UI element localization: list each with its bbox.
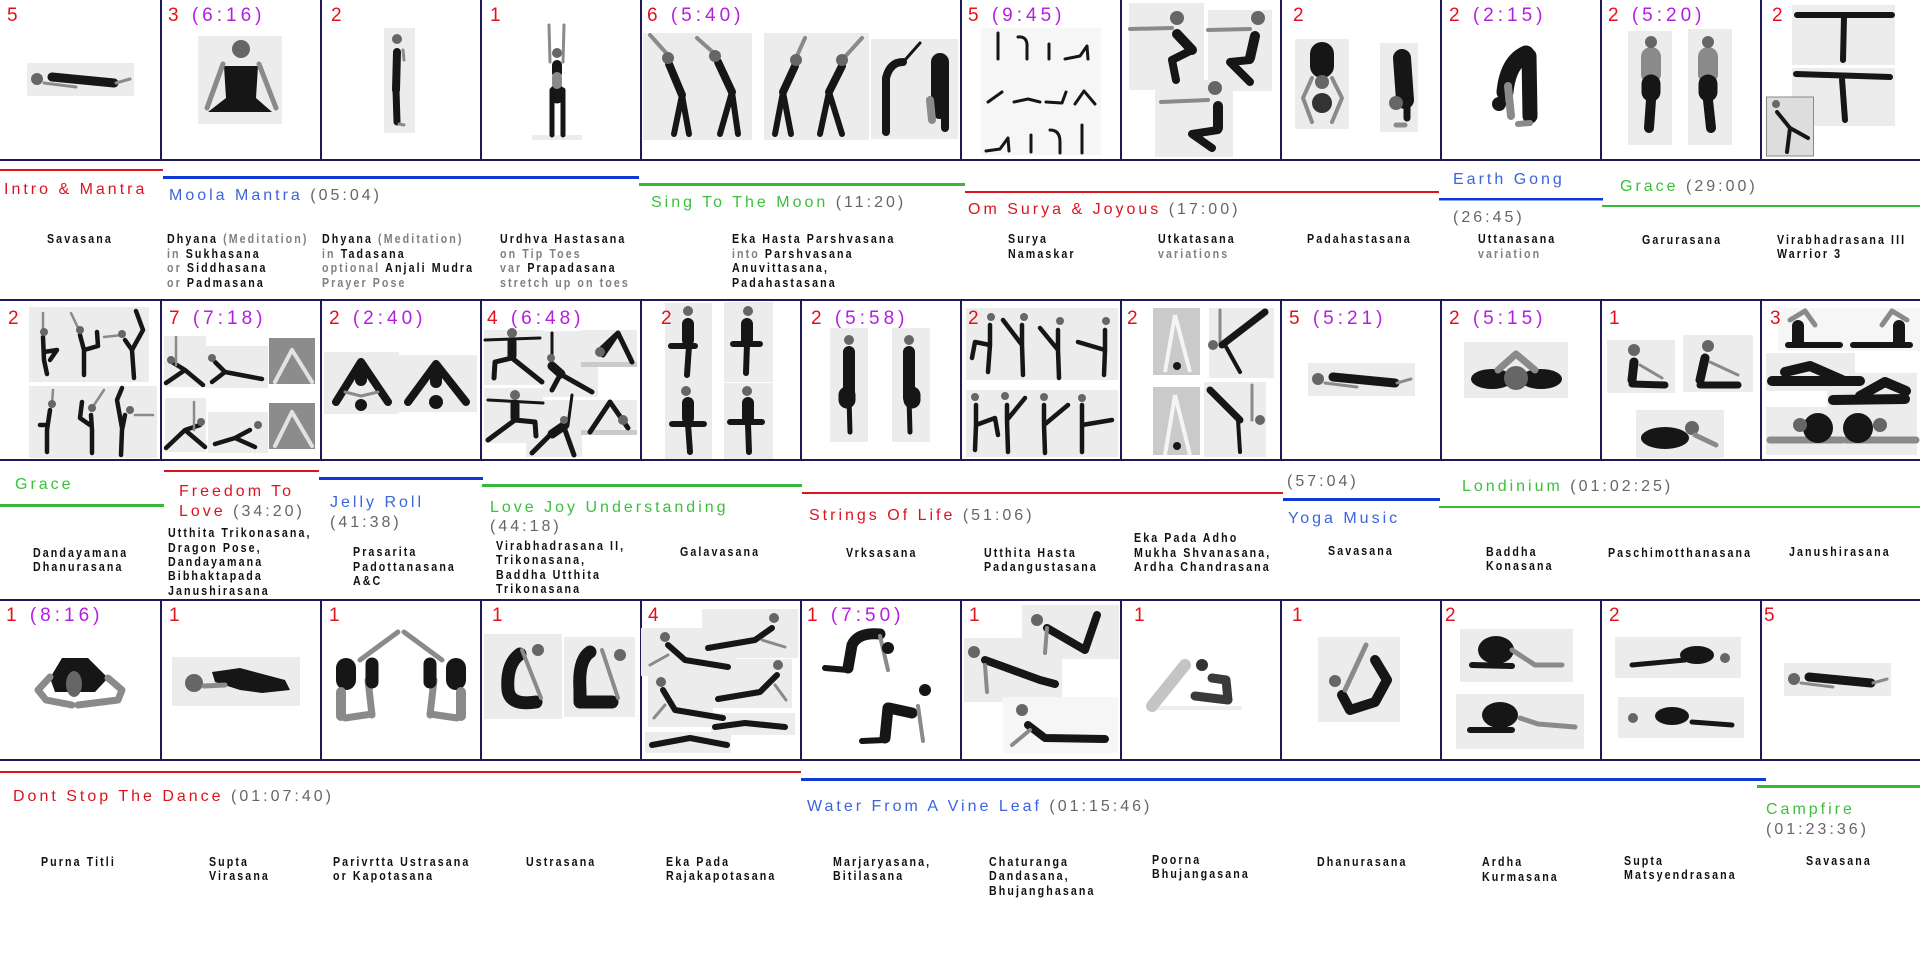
pose name: Utthita Trikonasana group: Dandayamana [168, 554, 263, 569]
rule: Earth Gong [1439, 198, 1603, 200]
pose name: Marjaryasana, Bitilasana: Bitilasana [833, 868, 904, 883]
number: 1 [490, 5, 505, 26]
panel: Eka Pada Adho Mukha Shvanasana [1127, 308, 1274, 457]
pose name: Surya Namaskar: Namaskar [1008, 246, 1076, 261]
pose name: Supta Virasana: Supta [209, 854, 249, 869]
number: 2 [1609, 605, 1624, 626]
number: 1 [969, 605, 984, 626]
panel: Uttanasana [1449, 5, 1546, 124]
pose name: Dhyana in Tadasana: Prayer Pose [322, 275, 407, 290]
rule: Londinium [1439, 506, 1920, 508]
pose name: Chaturanga group: Dandasana, [989, 868, 1070, 883]
number: 5 [1764, 605, 1779, 626]
heading: Yoga Music: (57:04) [1287, 473, 1359, 490]
number: 2 [1772, 5, 1787, 26]
heading: Moola Mantra: Moola Mantra (05:04) [169, 187, 382, 204]
pose name: Eka Pada Adho Mukha Shvanasana: Eka Pada Adho [1134, 530, 1238, 545]
heading: Love Joy Understanding: (44:18) [490, 518, 562, 535]
rule: Grace [0, 504, 164, 507]
pose name: Purna Titli: Purna Titli [41, 854, 116, 869]
number and time: 2 (5:15) [1449, 308, 1546, 329]
figures: one-legged pigeon series [641, 609, 798, 753]
number: 2 [1127, 308, 1142, 329]
panel: Purna Titli [6, 605, 122, 705]
figures: camel pose [484, 634, 635, 719]
pose name: Poorna Bhujangasana: Bhujangasana [1152, 866, 1250, 881]
number: 2 [968, 308, 983, 329]
panel: Tadasana [331, 5, 415, 133]
panel: Savasana (row 2) [1289, 308, 1415, 396]
figure: bow pose [1318, 637, 1400, 722]
figures: head to knee [1766, 308, 1920, 455]
number: 2 [331, 5, 346, 26]
pose name: Poorna Bhujangasana: Poorna [1152, 852, 1201, 867]
figures: chair pose variations [1129, 3, 1272, 157]
pose name: Dhyana in Sukhasana: or Padmasana [167, 275, 265, 290]
pose name: Utthita Trikonasana group: Bibhaktapada [168, 568, 263, 583]
number and time: 3 (6:16) [168, 5, 266, 26]
panel: Paschimotthanasana [1607, 308, 1753, 458]
panel: Galavasana [661, 302, 773, 459]
number and time: 1 (7:50) [807, 605, 904, 626]
pose name: Virabhadrasana II group: Baddha Utthita [496, 567, 601, 582]
figures: warrior, extended angle, pyramid [484, 328, 637, 457]
panel: Padahastasana [1293, 5, 1418, 132]
number: 2 [1293, 5, 1308, 26]
pose name: Vrksasana: Vrksasana [846, 545, 918, 560]
pose name: Urdhva Hastasana: Urdhva Hastasana [500, 231, 626, 246]
panel: Supta Virasana [169, 605, 300, 706]
number and time: 6 (5:40) [647, 5, 744, 26]
rule: Moola Mantra [163, 176, 639, 179]
heading: Londinium: Londinium (01:02:25) [1462, 478, 1673, 495]
pose name: Supta Matsyendrasana: Supta [1624, 853, 1664, 868]
panel: Dhanurasana [1292, 605, 1400, 722]
pose name: Supta Matsyendrasana: Matsyendrasana [1624, 867, 1737, 882]
panel: Poorna Bhujangasana [1134, 605, 1242, 710]
figures: extended hand to big toe [966, 308, 1118, 457]
figure: lying pose [1308, 363, 1415, 396]
rule: Om Surya & Joyous [965, 191, 1439, 193]
figure: mirrored camel pair [341, 632, 461, 718]
pose name: Utkatasana: Utkatasana [1158, 231, 1236, 246]
number: 2 [8, 308, 23, 329]
panel: Parivrtta Ustrasana [329, 605, 461, 718]
figures: wide-leg fold [324, 352, 477, 414]
number: 1 [492, 605, 507, 626]
pose name: Padahastasana: Padahastasana [1307, 231, 1412, 246]
panel: Savasana (row 1) [7, 5, 134, 96]
number: 2 [661, 308, 676, 329]
pose name: Parivrtta Ustrasana: Parivrtta Ustrasana [333, 854, 470, 869]
panel: Savasana (row 3) [1764, 605, 1891, 696]
number and time: 5 (5:21) [1289, 308, 1386, 329]
panel: Supta Matsyendrasana [1609, 605, 1744, 738]
number and time: 2 (2:15) [1449, 5, 1546, 26]
panel: Garurasana [1608, 5, 1732, 145]
pose name: Virabhadrasana II group: Trikonasana [496, 581, 581, 596]
pose name: Chaturanga group: Bhujanghasana [989, 883, 1095, 898]
heading: Water From A Vine Leaf: Water From A Vine Leaf (01:15:46) [807, 798, 1152, 815]
heading: Campfire: Campfire [1766, 801, 1855, 818]
pose name: Galavasana: Galavasana [680, 544, 760, 559]
heading: Grace: Grace (29:00) [1620, 178, 1758, 195]
number: 4 [648, 605, 663, 626]
panel: Dandayamana Dhanurasana [8, 307, 157, 458]
pose name: Ardha Kurmasana: Ardha [1482, 854, 1523, 869]
panel: Surya Namaskar [968, 5, 1101, 155]
pose name: Dhyana in Tadasana: Dhyana (Meditation) [322, 231, 464, 246]
figures: seated forward bend [1607, 335, 1753, 458]
pose name: Garurasana: Garurasana [1642, 232, 1722, 247]
panel: Ustrasana [484, 605, 635, 719]
figure: lying pose [1784, 663, 1891, 696]
figure: lying pose [27, 63, 134, 96]
heading: Love Joy Understanding: Love Joy Understanding [490, 499, 729, 516]
pose name: Virabhadrasana III: Virabhadrasana III [1777, 232, 1906, 247]
pose name: Parivrtta Ustrasana: or Kapotasana [333, 868, 434, 883]
pose name: Utkatasana: variations [1158, 246, 1229, 261]
pose name: Dhyana in Sukhasana: or Siddhasana [167, 260, 268, 275]
number: 3 [1129, 5, 1144, 26]
figures: one-leg down dog and half moon [1153, 308, 1274, 457]
heading: Campfire: (01:23:36) [1766, 821, 1869, 838]
pose name: Dandayamana Dhanurasana: Dhanurasana [33, 559, 123, 574]
number and time: 2 (5:58) [811, 308, 908, 329]
panel: Chaturanga [964, 605, 1119, 753]
panel: Utthita Trikonasana [164, 308, 315, 453]
figures: sun salutation sequence [981, 28, 1101, 155]
heading: Jelly Roll: (41:38) [330, 514, 402, 531]
pose name: Baddha Konasana: Konasana [1486, 558, 1554, 573]
figures: eagle pose, back view [1628, 29, 1732, 145]
figures: triangle, dragon, fold [164, 336, 315, 453]
pose name: Ustrasana: Ustrasana [526, 854, 596, 869]
pose name: Dhanurasana: Dhanurasana [1317, 854, 1407, 869]
pose name: Eka Pada Adho Mukha Shvanasana: Mukha Shvanasana, [1134, 545, 1271, 560]
heading: Yoga Music: Yoga Music [1288, 510, 1400, 527]
figures: low plank, plank, cobra [964, 605, 1119, 753]
rule: Intro & Mantra [0, 169, 163, 171]
pose name: Dhyana in Sukhasana: Dhyana (Meditation) [167, 231, 309, 246]
rule: Strings Of Life [802, 492, 1283, 494]
pose name: Prasarita Padottanasana: Padottanasana [353, 559, 456, 574]
pose name: Utthita Trikonasana group: Utthita Trikonasana, [168, 525, 312, 540]
panel: Utkatasana [1129, 3, 1272, 157]
number: 1 [1134, 605, 1149, 626]
figure: reclined hero [172, 657, 300, 706]
panel: Urdhva Hastasana [490, 5, 582, 140]
pose name: Prasarita Padottanasana: Prasarita [353, 544, 417, 559]
figures: flying pigeon standing [665, 302, 773, 459]
heading: Earth Gong: (26:45) [1453, 209, 1525, 226]
pose name: Ardha Kurmasana: Kurmasana [1482, 869, 1559, 884]
number: 3 [1770, 308, 1785, 329]
figures: tree pose [830, 328, 930, 442]
panel: Marjaryasana [807, 605, 931, 741]
pose name: Virabhadrasana II group: Virabhadrasana II, [496, 538, 625, 553]
number: 1 [169, 605, 184, 626]
pose name: Surya Namaskar: Surya [1008, 231, 1048, 246]
panel: Vrksasana [811, 308, 930, 442]
pose name: Utthita Hasta Padangustasana: Padangustasana [984, 559, 1098, 574]
number and time: 4 (6:48) [487, 308, 584, 329]
pose name: Janushirasana: Janushirasana [1789, 544, 1891, 559]
pose name: Urdhva Hastasana: var Prapadasana [500, 260, 617, 275]
pose name: Eka Pada Rajakapotasana: Eka Pada [666, 854, 730, 869]
pose name: Utthita Hasta Padangustasana: Utthita Hasta [984, 545, 1077, 560]
pose name: Eka Hasta Parshvasana: into Parshvasana [732, 246, 854, 261]
heading: Sing To The Moon: Sing To The Moon (11:20) [651, 194, 906, 211]
number and time: 7 (7:18) [169, 308, 266, 329]
figures: side bends and forward fold [643, 33, 958, 140]
heading: Strings Of Life: Strings Of Life (51:06) [809, 507, 1035, 524]
number and time: 2 (2:40) [329, 308, 426, 329]
figure: butterfly fold [38, 658, 122, 705]
pose name: Eka Hasta Parshvasana: Padahastasana [732, 275, 837, 290]
number: 5 [7, 5, 22, 26]
panel: Sukhasana [168, 5, 282, 124]
pose name: Utthita Trikonasana group: Janushirasana [168, 583, 270, 598]
figure: seated meditation [198, 36, 282, 124]
figures: warrior 3 [1766, 5, 1895, 156]
pose name: Utthita Trikonasana group: Dragon Pose, [168, 540, 262, 555]
rule: Water From A Vine Leaf [801, 778, 1766, 781]
pose name: Urdhva Hastasana: on Tip Toes [500, 246, 582, 261]
pose name: Eka Pada Rajakapotasana: Rajakapotasana [666, 868, 776, 883]
figure: full cobra [1148, 659, 1242, 710]
pose name: Baddha Konasana: Baddha [1486, 544, 1538, 559]
heading: Grace: Grace [15, 476, 74, 493]
rule: Campfire [1757, 785, 1920, 788]
pose name: Dhyana in Tadasana: in Tadasana [322, 246, 406, 261]
rule: Jelly Roll [319, 477, 483, 480]
number: 1 [329, 605, 344, 626]
pose name: Eka Pada Adho Mukha Shvanasana: Ardha Chandrasana [1134, 559, 1271, 574]
pose name: Urdhva Hastasana: stretch up on toes [500, 275, 630, 290]
heading: Dont Stop The Dance: Dont Stop The Dance (01:07:40) [13, 788, 334, 805]
pose name: Prasarita Padottanasana: A&C [353, 573, 382, 588]
pose name: Eka Hasta Parshvasana: Eka Hasta Parshvasana [732, 231, 895, 246]
panel: Janushirasana [1766, 308, 1920, 455]
figure: bound angle fold [1464, 342, 1568, 398]
panel: Eka Pada Rajakapotasana [641, 605, 798, 753]
pose name: Savasana: Savasana [47, 231, 113, 246]
pose name: Eka Hasta Parshvasana: Anuvittasana, [732, 260, 829, 275]
rule: Sing To The Moon [639, 183, 965, 186]
figure: arms overhead [532, 25, 582, 140]
pose name: Dhyana in Sukhasana: in Sukhasana [167, 246, 261, 261]
number and time: 1 (8:16) [6, 605, 104, 626]
pose name: Uttanasana: Uttanasana [1478, 231, 1556, 246]
rule: Freedom To Love [164, 470, 319, 472]
panel: Virabhadrasana II [484, 308, 637, 457]
pose name: Savasana: Savasana [1806, 853, 1872, 868]
panel: Prasarita Padottanasana [324, 308, 477, 414]
figures: forward fold, front and side [1295, 39, 1418, 132]
figure: standing prayer [384, 28, 415, 133]
heading: Earth Gong: Earth Gong [1453, 171, 1565, 188]
rule: Dont Stop The Dance [0, 771, 801, 773]
pose name: Marjaryasana, Bitilasana: Marjaryasana, [833, 854, 931, 869]
figures: half tortoise [1456, 629, 1584, 749]
rule: Grace [1602, 205, 1920, 207]
rule: Yoga Music [1283, 498, 1440, 501]
number and time: 2 (5:20) [1608, 5, 1706, 26]
number and time: 5 (9:45) [968, 5, 1066, 26]
number: 1 [1609, 308, 1624, 329]
panel: Utthita Hasta Padangustasana [966, 308, 1118, 457]
rule: Love Joy Understanding [482, 484, 802, 487]
number: 1 [1292, 605, 1307, 626]
pose name: Chaturanga group: Chaturanga [989, 854, 1069, 869]
panel: Baddha Konasana [1449, 308, 1568, 398]
figures: standing bow variations [29, 307, 157, 458]
pose name: Savasana: Savasana [1328, 543, 1394, 558]
figures: cat and cow [825, 634, 931, 741]
pose name: Dhyana in Tadasana: optional Anjali Mudra [322, 260, 474, 275]
panel: Eka Hasta Parshvasana [643, 5, 958, 140]
pose name: Virabhadrasana III: Warrior 3 [1777, 246, 1842, 261]
pose name: Virabhadrasana II group: Trikonasana, [496, 552, 586, 567]
heading: Jelly Roll: Jelly Roll [330, 494, 424, 511]
heading: Freedom To Love: Freedom To [179, 483, 294, 500]
panel: Ardha Kurmasana [1445, 605, 1584, 749]
figures: reclined twist [1615, 637, 1744, 738]
number: 2 [1445, 605, 1460, 626]
pose name: Uttanasana: variation [1478, 246, 1541, 261]
pose name: Dandayamana Dhanurasana: Dandayamana [33, 545, 128, 560]
heading: Om Surya & Joyous: Om Surya & Joyous (17:00) [968, 201, 1240, 218]
pose name: Supta Virasana: Virasana [209, 868, 270, 883]
heading: Freedom To Love: Love (34:20) [179, 503, 305, 520]
panel: Virabhadrasana III [1766, 5, 1895, 156]
pose name: Paschimotthanasana: Paschimotthanasana [1608, 545, 1752, 560]
heading: Intro & Mantra: Intro & Mantra [4, 181, 147, 198]
figure: standing forward bend [1492, 54, 1530, 124]
